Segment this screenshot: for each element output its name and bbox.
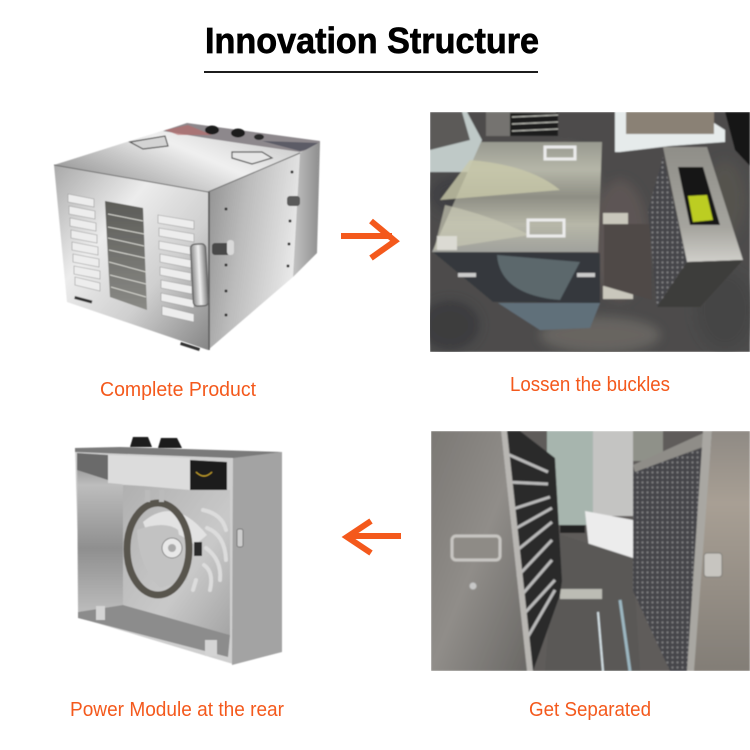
title: Innovation Structure [205, 20, 539, 61]
label: Power Module at the rear: Power Module at the rear [70, 699, 284, 721]
label: Lossen the buckles: Lossen the buckles [510, 374, 670, 396]
photo: assembled dehydrator [54, 123, 320, 351]
label: Complete Product: Complete Product [100, 379, 256, 401]
panel: power module at the rear [70, 437, 284, 721]
photo: separated unit from above [420, 112, 750, 353]
photo: unit halves pulled apart [431, 431, 750, 671]
photo: open rear module with fan [75, 437, 282, 665]
panel: get separated [431, 431, 750, 721]
label: Get Separated: Get Separated [529, 699, 651, 721]
arrow: left [347, 521, 401, 553]
arrow: right [341, 221, 395, 258]
panel: lossen the buckles [420, 112, 750, 396]
panel: complete product [54, 123, 320, 401]
